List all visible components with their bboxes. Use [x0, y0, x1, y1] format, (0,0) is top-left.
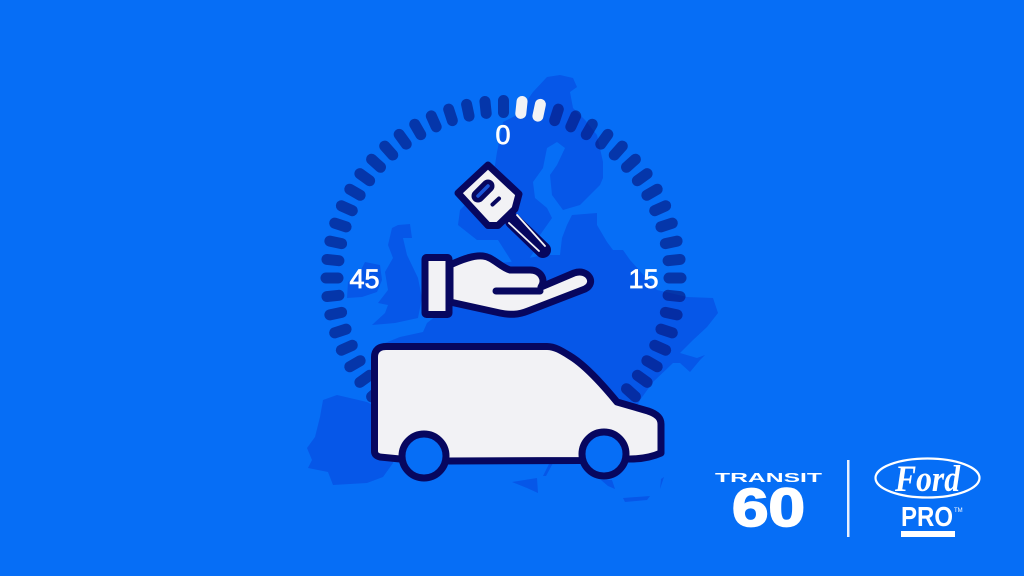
trademark: TM [954, 508, 963, 514]
60 numeral: 60 [732, 478, 805, 538]
Scandinavia [458, 75, 603, 262]
gauge label 0: 0 [495, 120, 511, 150]
Mediterranean islands [512, 463, 664, 502]
gauge ticks [320, 95, 686, 405]
gauge label 45: 45 [349, 264, 380, 294]
logo divider [847, 460, 850, 537]
map of Europe [307, 75, 718, 502]
icon: van [374, 346, 661, 478]
Pro wordmark: PRO [901, 501, 953, 532]
logo: Transit 60 [715, 470, 822, 538]
Iberia [307, 395, 400, 485]
gauge label 15: 15 [628, 264, 659, 294]
logo: Ford Pro [876, 458, 980, 537]
icon: open hand [425, 256, 591, 314]
Ireland [347, 262, 382, 298]
Ford oval [876, 458, 980, 498]
Great Britain [372, 224, 422, 325]
European mainland [385, 213, 718, 450]
Pro underline [901, 531, 955, 537]
gauge progress ticks [515, 95, 547, 123]
icon: key [458, 165, 545, 251]
Transit wordmark: TRANSIT [715, 470, 822, 485]
Ford script: Ford [894, 459, 960, 500]
